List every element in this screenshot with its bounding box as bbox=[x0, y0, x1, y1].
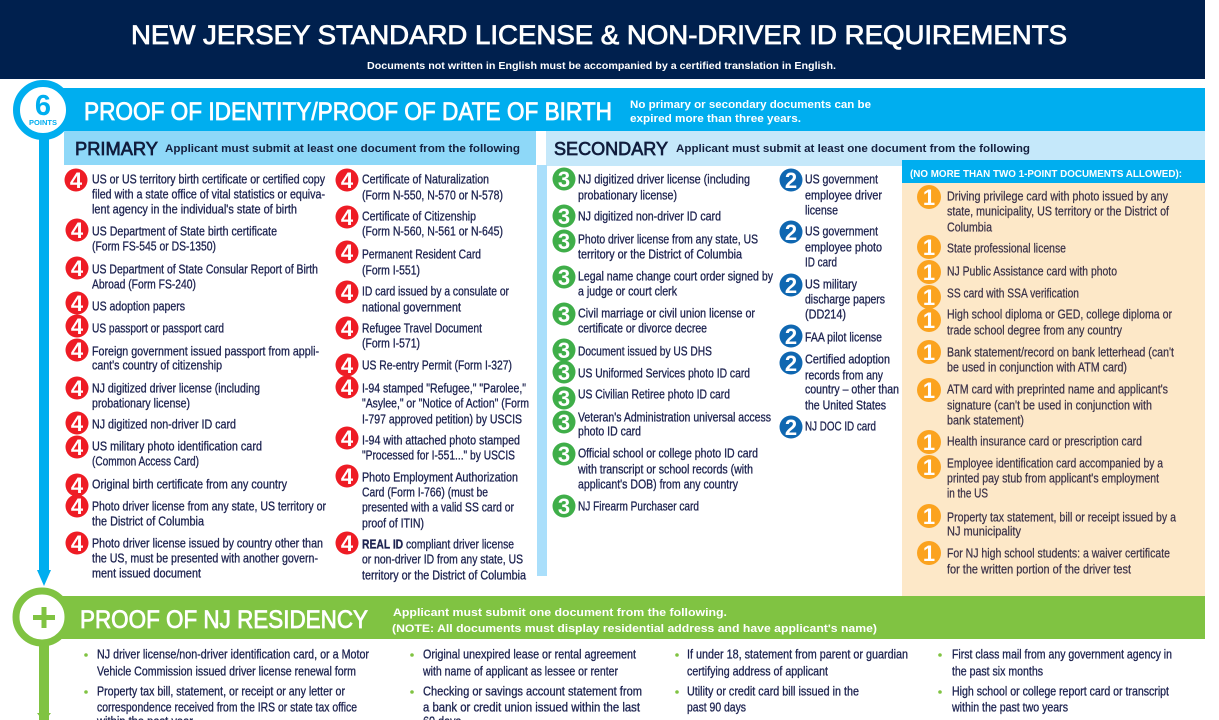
item bbox=[66, 494, 326, 529]
item bbox=[552, 204, 721, 229]
item: state, municipality, US territory or the District of bbox=[947, 205, 1169, 219]
item: 3 bbox=[558, 386, 570, 411]
item: 1 bbox=[923, 541, 935, 566]
panel: primary 4-point documents, column 1 bbox=[64, 168, 326, 581]
item: 2 bbox=[785, 415, 797, 440]
item bbox=[552, 265, 774, 299]
item: probationary license) bbox=[578, 189, 677, 203]
primary header bbox=[64, 131, 536, 165]
item: Civil marriage or civil union license or bbox=[578, 307, 755, 321]
item: 3 bbox=[558, 167, 570, 192]
item: license bbox=[805, 204, 838, 218]
item: trade school degree from any country bbox=[947, 324, 1123, 338]
item: ID card bbox=[805, 256, 837, 270]
item bbox=[917, 308, 1172, 338]
item: "Asylee," or "Notice of Action" (Form bbox=[362, 397, 529, 411]
item bbox=[552, 338, 712, 363]
item: 2 bbox=[785, 351, 797, 376]
arrow: residency flow bbox=[37, 640, 51, 720]
item bbox=[917, 185, 1169, 235]
item bbox=[336, 280, 509, 315]
item: territory or the District of Columbia bbox=[578, 248, 742, 262]
list: residency column 3: Utility or credit card bill issued in the bbox=[687, 685, 859, 699]
item bbox=[917, 455, 1163, 501]
item bbox=[64, 168, 326, 217]
item: Certificate of Naturalization bbox=[362, 173, 489, 187]
item: 4 bbox=[71, 218, 84, 243]
item: Certified adoption bbox=[805, 353, 890, 367]
item bbox=[917, 541, 1170, 577]
item bbox=[336, 375, 529, 427]
item: NJ digitized driver license (including bbox=[578, 173, 750, 187]
item bbox=[336, 168, 503, 203]
item: US military photo identification card bbox=[92, 440, 262, 454]
item: Document issued by US DHS bbox=[578, 345, 712, 359]
item bbox=[66, 473, 288, 498]
item: I-797 approved petition) by USCIS bbox=[362, 413, 522, 427]
item: US passport or passport card bbox=[92, 322, 224, 336]
item: 4 bbox=[341, 280, 354, 305]
item: country – other than bbox=[805, 383, 899, 397]
list: residency column 3 bbox=[675, 648, 908, 715]
list: residency column 1: Property tax bill, statement, or receipt or any letter or bbox=[97, 685, 345, 699]
item: NJ digitized non-driver ID card bbox=[92, 418, 236, 432]
item bbox=[780, 324, 882, 349]
item: discharge papers bbox=[805, 293, 885, 307]
item: Photo driver license from any state, US territory or bbox=[92, 500, 326, 514]
item: 4 bbox=[341, 316, 354, 341]
item: NJ digitized non-driver ID card bbox=[578, 210, 721, 224]
item bbox=[780, 220, 882, 270]
item: 4 bbox=[71, 338, 84, 363]
item bbox=[336, 240, 481, 278]
item: (DD214) bbox=[805, 308, 846, 322]
item bbox=[66, 218, 277, 254]
item bbox=[552, 360, 750, 385]
item: US Department of State Consular Report of Birth bbox=[92, 263, 318, 277]
list: residency column 1: Vehicle Commission issued driver license renewal form bbox=[97, 665, 356, 679]
section note: residency: (NOTE: All documents must display residential address and have applicant's name) bbox=[392, 623, 877, 635]
item: 3 bbox=[558, 302, 570, 327]
item: US adoption papers bbox=[92, 300, 185, 314]
item: 4 bbox=[71, 494, 84, 519]
item bbox=[552, 229, 758, 262]
item: 4 bbox=[71, 314, 84, 339]
label bar: no more than two: (NO MORE THAN TWO 1-POINT DOCUMENTS ALLOWED): bbox=[910, 169, 1182, 180]
list: residency column 1 bbox=[84, 648, 369, 720]
item: US Uniformed Services photo ID card bbox=[578, 367, 750, 381]
item: "Processed for I-551..." by USCIS bbox=[362, 449, 515, 463]
item: be used in conjunction with ATM card) bbox=[947, 361, 1127, 375]
list: residency column 1: correspondence received from the IRS or state tax office bbox=[97, 701, 357, 715]
list: residency column 4: First class mail from any government agency in bbox=[952, 648, 1172, 662]
item: ATM card with preprinted name and applicant's bbox=[947, 383, 1168, 397]
item bbox=[66, 338, 319, 373]
item: territory or the District of Columbia bbox=[362, 569, 526, 583]
list: residency column 4: High school or college report card or transcript bbox=[952, 685, 1169, 699]
item: 4 bbox=[341, 464, 354, 489]
item: Photo Employment Authorization bbox=[362, 471, 518, 485]
item bbox=[336, 426, 520, 463]
item: 4 bbox=[341, 205, 354, 230]
item bbox=[552, 386, 730, 411]
item: US or US territory birth certificate or certified copy bbox=[92, 173, 326, 187]
item: US Re-entry Permit (Form I-327) bbox=[362, 359, 512, 373]
item bbox=[66, 314, 224, 339]
item: 3 bbox=[558, 410, 570, 435]
item: Bank statement/record on bank letterhead (can't bbox=[947, 346, 1174, 360]
item: printed pay stub from applicant's employment bbox=[947, 472, 1159, 486]
item: 4 bbox=[71, 473, 84, 498]
list: residency column 2: with name of applicant as lessee or renter bbox=[422, 665, 618, 679]
item: (Form I-551) bbox=[362, 264, 420, 278]
item: FAA pilot license bbox=[805, 331, 882, 345]
item bbox=[66, 531, 323, 581]
item: 4 bbox=[71, 435, 84, 460]
primary header: PRIMARY bbox=[75, 139, 158, 159]
item bbox=[336, 464, 518, 531]
item: probationary license) bbox=[92, 397, 190, 411]
item bbox=[336, 205, 503, 239]
item: presented with a valid SS card or bbox=[362, 501, 514, 515]
item: 3 bbox=[558, 494, 570, 519]
item: 1 bbox=[923, 235, 935, 260]
item: Driving privilege card with photo issued by any bbox=[947, 190, 1169, 204]
item bbox=[780, 273, 885, 322]
item: 1 bbox=[923, 430, 935, 455]
panel: secondary 3-point documents bbox=[552, 167, 774, 519]
item: US government bbox=[805, 173, 878, 187]
item: 3 bbox=[558, 360, 570, 385]
item: Veteran's Administration universal access bbox=[578, 411, 771, 425]
item bbox=[66, 291, 185, 316]
section note: identity: expired more than three years. bbox=[630, 113, 801, 125]
icon: 6 points badge: POINTS bbox=[29, 118, 57, 127]
panel: primary 4-point documents, column 2 bbox=[336, 168, 529, 583]
item: 1 bbox=[923, 308, 935, 333]
item: 2 bbox=[785, 220, 797, 245]
item: with transcript or school records (with bbox=[577, 463, 753, 477]
item: (Common Access Card) bbox=[92, 455, 199, 469]
item: applicant's DOB) from any country bbox=[578, 478, 739, 492]
item: in the US bbox=[947, 487, 988, 501]
item bbox=[917, 430, 1142, 455]
item: 1 bbox=[923, 504, 935, 529]
item: I-94 stamped "Refugee," "Parolee," bbox=[362, 382, 526, 396]
item bbox=[66, 376, 260, 411]
list: residency column 2 bbox=[410, 648, 642, 720]
item: (Form FS-545 or DS-1350) bbox=[92, 240, 216, 254]
item: US Department of State birth certificate bbox=[92, 225, 277, 239]
item: 4 bbox=[341, 353, 354, 378]
item: the United States bbox=[805, 399, 886, 413]
item: the District of Columbia bbox=[92, 515, 204, 529]
list: residency column 4: the past six months bbox=[952, 665, 1043, 679]
item: (Form I-571) bbox=[362, 337, 420, 351]
item: ID card issued by a consulate or bbox=[362, 285, 509, 299]
item bbox=[917, 260, 1117, 285]
list: residency column 1: NJ driver license/non-driver identification card, or a Motor bbox=[97, 648, 369, 662]
item: I-94 with attached photo stamped bbox=[362, 434, 520, 448]
item bbox=[336, 531, 526, 583]
item: Employee identification card accompanied by a bbox=[947, 457, 1163, 471]
item: NJ municipality bbox=[947, 525, 1022, 539]
item: proof of ITIN) bbox=[362, 517, 424, 531]
item: 4 bbox=[71, 411, 84, 436]
item: Card (Form I-766) (must be bbox=[362, 486, 488, 500]
item: 1 bbox=[923, 185, 935, 210]
list: residency column 4 bbox=[938, 648, 1172, 715]
item: records from any bbox=[805, 369, 884, 383]
item bbox=[66, 435, 262, 469]
list: residency column 3: past 90 days bbox=[687, 701, 746, 715]
item: Foreign government issued passport from appli- bbox=[92, 345, 319, 359]
item bbox=[552, 302, 755, 336]
item: 2 bbox=[785, 273, 797, 298]
item: 4 bbox=[71, 256, 84, 281]
item: REAL ID compliant driver license bbox=[362, 538, 514, 552]
item: 3 bbox=[558, 338, 570, 363]
item: Legal name change court order signed by bbox=[578, 270, 774, 284]
item: cant's country of citizenship bbox=[92, 359, 222, 373]
section band: proof of NJ residency bbox=[50, 596, 1205, 639]
panel: secondary 2-point documents bbox=[780, 168, 899, 440]
item: 1 bbox=[923, 340, 935, 365]
item: for the written portion of the driver test bbox=[947, 563, 1131, 577]
item: 4 bbox=[341, 168, 354, 193]
item bbox=[66, 256, 318, 292]
label bar: no more than two bbox=[902, 160, 1205, 183]
section note: identity bbox=[630, 99, 871, 125]
item bbox=[917, 340, 1174, 375]
item bbox=[917, 378, 1168, 428]
subtitle: Documents not written in English must be accompanied by a certified translation in English. bbox=[367, 60, 836, 72]
list: residency column 2: Original unexpired lease or rental agreement bbox=[423, 648, 636, 662]
item: 4 bbox=[341, 375, 354, 400]
item: Photo driver license issued by country other than bbox=[92, 537, 323, 551]
item: 1 bbox=[923, 285, 935, 310]
item: photo ID card bbox=[578, 425, 641, 439]
item: State professional license bbox=[947, 242, 1066, 256]
section heading: residency: PROOF OF NJ RESIDENCY bbox=[80, 606, 368, 634]
panel: secondary 1-point documents bbox=[902, 160, 1205, 596]
item: a judge or court clerk bbox=[578, 285, 678, 299]
icon: plus badge bbox=[16, 591, 68, 643]
item: NJ Public Assistance card with photo bbox=[947, 265, 1117, 279]
item: Original birth certificate from any country bbox=[92, 478, 288, 492]
item: 4 bbox=[341, 426, 354, 451]
item: national government bbox=[362, 301, 461, 315]
item bbox=[552, 442, 758, 492]
item bbox=[780, 351, 899, 413]
item: 3 bbox=[558, 265, 570, 290]
secondary header: SECONDARY bbox=[554, 139, 668, 159]
list: residency column 4: within the past two years bbox=[951, 701, 1068, 715]
list: residency column 2: Checking or savings account statement from bbox=[423, 685, 642, 699]
item: 3 bbox=[558, 229, 570, 254]
section heading: identity: PROOF OF IDENTITY/PROOF OF DATE OF BIRTH bbox=[84, 98, 612, 126]
item: 4 bbox=[71, 376, 84, 401]
item: US military bbox=[805, 278, 858, 292]
item: signature (can't be used in conjunction with bbox=[947, 399, 1152, 413]
item bbox=[552, 167, 750, 203]
list: residency column 3: certifying address of applicant bbox=[687, 665, 828, 679]
item bbox=[917, 285, 1079, 310]
item: Permanent Resident Card bbox=[362, 248, 481, 262]
header banner bbox=[0, 0, 1205, 79]
item: 3 bbox=[558, 442, 570, 467]
item: High school diploma or GED, college diploma or bbox=[947, 308, 1172, 322]
item bbox=[552, 494, 699, 519]
item: lent agency in the individual's state of birth bbox=[92, 203, 297, 217]
section band: proof of identity bbox=[50, 88, 1205, 131]
primary header: Applicant must submit at least one document from the following bbox=[165, 143, 520, 155]
item bbox=[66, 411, 236, 436]
item: Photo driver license from any state, US bbox=[578, 233, 758, 247]
arrow: identity flow bbox=[37, 135, 51, 586]
item bbox=[336, 353, 512, 378]
item: US Civilian Retiree photo ID card bbox=[578, 388, 730, 402]
item: (Form N-550, N-570 or N-578) bbox=[362, 189, 503, 203]
item: NJ digitized driver license (including bbox=[92, 382, 260, 396]
item: Certificate of Citizenship bbox=[362, 210, 476, 224]
item bbox=[917, 504, 1176, 539]
item bbox=[917, 235, 1066, 260]
item: SS card with SSA verification bbox=[947, 287, 1079, 301]
item: Official school or college photo ID card bbox=[578, 447, 758, 461]
item bbox=[780, 415, 876, 440]
item: For NJ high school students: a waiver certificate bbox=[947, 547, 1170, 561]
secondary header: Applicant must submit at least one document from the following bbox=[676, 143, 1030, 155]
list: residency column 2: a bank or credit union issued within the last bbox=[423, 701, 640, 715]
item: 1 bbox=[923, 260, 935, 285]
item: Columbia bbox=[947, 221, 992, 235]
item: 2 bbox=[785, 324, 797, 349]
item: employee photo bbox=[805, 241, 882, 255]
item: certificate or divorce decree bbox=[578, 322, 707, 336]
item: the US, must be presented with another govern- bbox=[92, 552, 318, 566]
item: ment issued document bbox=[92, 567, 201, 581]
section note: identity: No primary or secondary documents can be bbox=[630, 99, 871, 111]
item: (Form N-560, N-561 or N-645) bbox=[362, 225, 503, 239]
item: Property tax statement, bill or receipt issued by a bbox=[947, 511, 1176, 525]
item: Abroad (Form FS-240) bbox=[92, 278, 196, 292]
item: filed with a state office of vital statistics or equiva- bbox=[92, 188, 325, 202]
section note: residency: Applicant must submit one document from the following. bbox=[393, 607, 727, 619]
item: 4 bbox=[71, 291, 84, 316]
item: Health insurance card or prescription card bbox=[947, 435, 1142, 449]
item: 4 bbox=[71, 531, 84, 556]
item: 2 bbox=[785, 168, 797, 193]
item: or non-driver ID from any state, US bbox=[362, 553, 523, 567]
section note: residency bbox=[392, 607, 877, 635]
item bbox=[780, 168, 882, 218]
item: bank statement) bbox=[947, 414, 1024, 428]
item: 1 bbox=[923, 455, 935, 480]
secondary header bbox=[546, 131, 1205, 166]
item: US government bbox=[805, 225, 878, 239]
icon: 6 points badge bbox=[16, 84, 70, 136]
item: 4 bbox=[70, 168, 83, 193]
item bbox=[336, 316, 482, 351]
list: residency column 3: If under 18, statement from parent or guardian bbox=[687, 648, 908, 662]
title: NEW JERSEY STANDARD LICENSE & NON-DRIVER ID REQUIREMENTS bbox=[131, 20, 1067, 50]
item: NJ DOC ID card bbox=[805, 420, 876, 434]
item: 4 bbox=[341, 531, 354, 556]
item: 3 bbox=[558, 204, 570, 229]
item: NJ Firearm Purchaser card bbox=[578, 500, 699, 514]
item: 1 bbox=[923, 378, 935, 403]
item bbox=[552, 410, 771, 439]
item: 4 bbox=[341, 240, 354, 265]
item: employee driver bbox=[805, 189, 882, 203]
icon: 6 points badge: 6 bbox=[35, 90, 51, 122]
item: Refugee Travel Document bbox=[362, 322, 482, 336]
column divider bbox=[537, 165, 547, 576]
